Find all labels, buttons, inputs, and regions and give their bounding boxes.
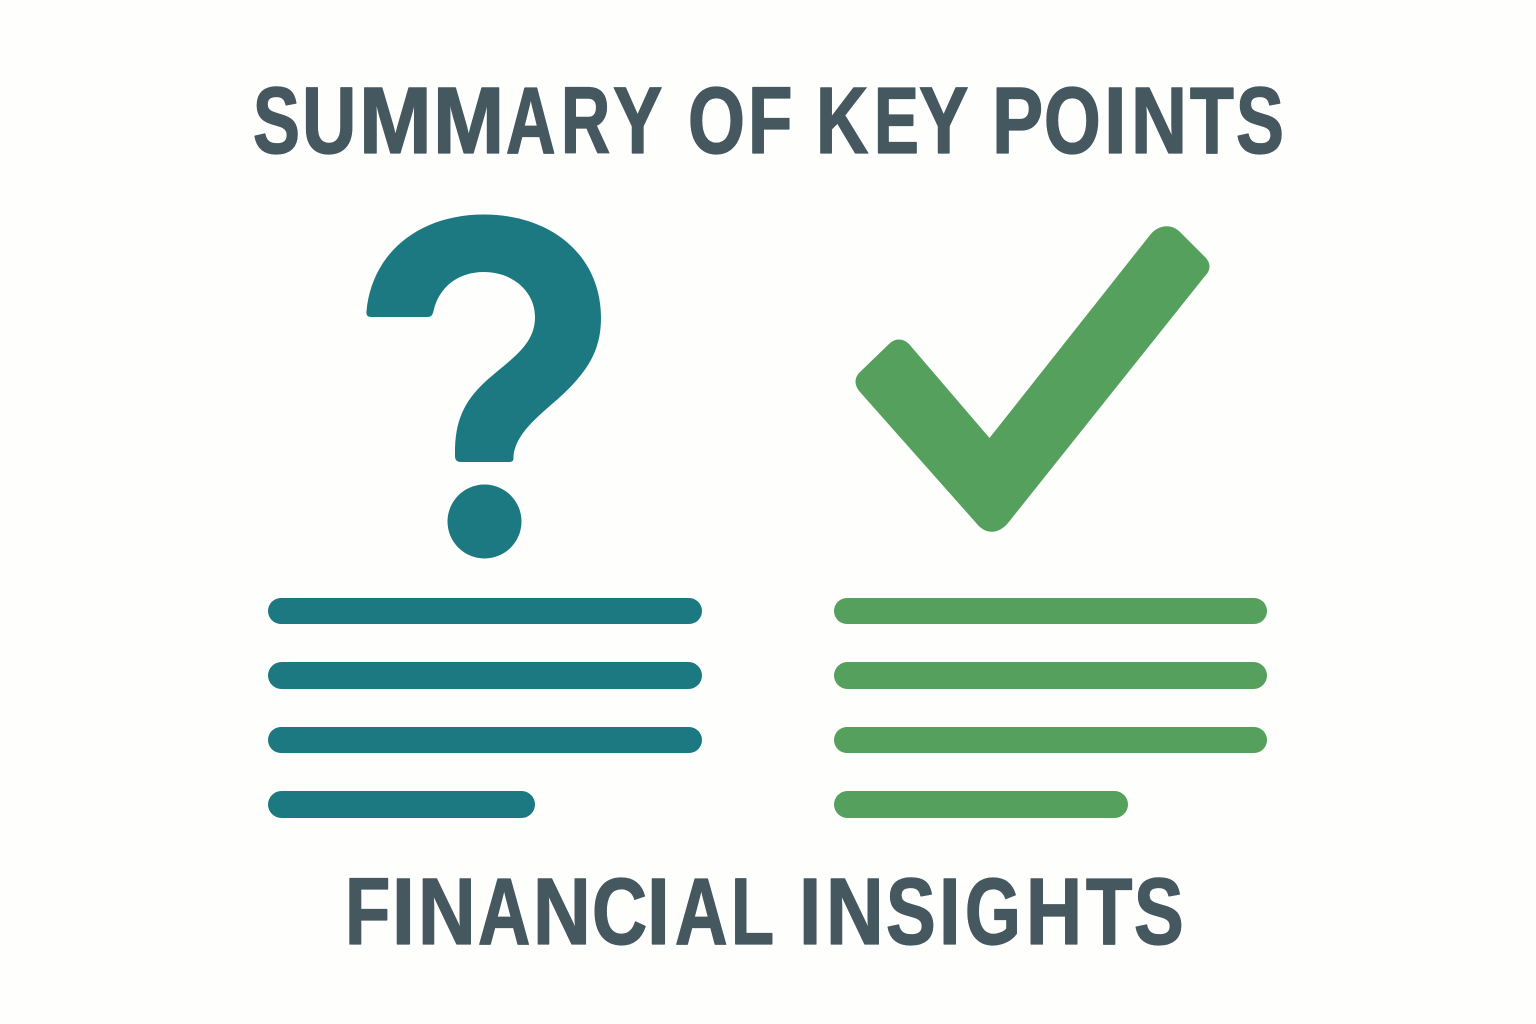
title: Y xyxy=(613,68,662,174)
title: E xyxy=(874,68,919,174)
footer heading: N xyxy=(533,859,591,965)
title: I xyxy=(1104,68,1126,174)
footer heading: H xyxy=(1026,859,1082,965)
title: R xyxy=(561,68,610,174)
footer heading: I xyxy=(647,859,670,965)
title xyxy=(253,68,1284,174)
footer heading xyxy=(345,859,1184,965)
panel: left text lines xyxy=(268,598,702,818)
footer heading: A xyxy=(675,859,727,965)
footer heading: T xyxy=(1086,859,1133,965)
footer heading: F xyxy=(345,859,390,965)
footer heading: A xyxy=(478,859,530,965)
footer heading: L xyxy=(731,859,774,965)
title: F xyxy=(748,68,792,174)
title: U xyxy=(302,68,356,174)
footer heading: S xyxy=(886,859,936,965)
icon: check mark xyxy=(856,226,1210,532)
footer heading: C xyxy=(592,859,647,965)
title: P xyxy=(992,68,1043,174)
title: T xyxy=(1190,68,1234,174)
title: Y xyxy=(919,68,968,174)
title: O xyxy=(688,68,744,174)
title: M xyxy=(433,68,504,174)
title: A xyxy=(506,68,555,174)
title: S xyxy=(253,68,300,174)
panel: right text lines xyxy=(834,598,1267,818)
title: M xyxy=(359,68,431,174)
title: S xyxy=(1236,68,1284,174)
title: N xyxy=(1131,68,1187,174)
icon: question mark xyxy=(366,214,601,558)
footer heading: N xyxy=(826,859,884,965)
title: K xyxy=(816,68,868,174)
footer heading: I xyxy=(392,859,415,965)
title: O xyxy=(1044,68,1100,174)
footer heading: N xyxy=(418,859,475,965)
footer heading: G xyxy=(965,859,1021,965)
footer heading: S xyxy=(1134,859,1184,965)
footer heading: I xyxy=(799,859,821,965)
footer heading: I xyxy=(939,859,961,965)
